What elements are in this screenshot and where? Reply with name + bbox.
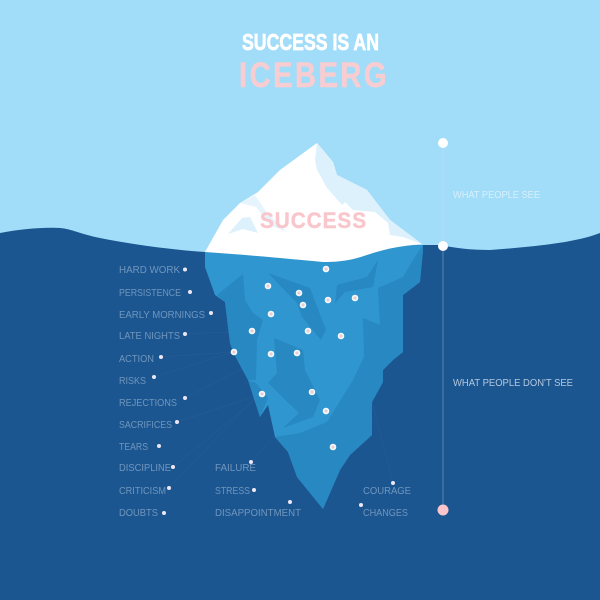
right column labels	[363, 485, 411, 519]
right column labels: CHANGES	[363, 507, 408, 519]
left column labels: ACTION	[119, 353, 154, 365]
iceberg	[205, 143, 423, 509]
left column labels: CRITICISM	[119, 485, 166, 497]
left column labels: REJECTIONS	[119, 397, 177, 409]
sea water	[0, 228, 600, 600]
iceberg: upper left snow shadow	[240, 195, 287, 232]
middle column labels: FAILURE	[215, 462, 256, 474]
title: SUCCESS IS AN	[242, 29, 379, 55]
left column labels	[119, 264, 205, 519]
right column labels: COURAGE	[363, 485, 411, 497]
label dots	[152, 268, 395, 515]
left column labels: RISKS	[119, 375, 146, 387]
left column labels: HARD WORK	[119, 264, 180, 276]
left column labels: DISCIPLINE	[119, 462, 171, 474]
left column labels: LATE NIGHTS	[119, 330, 180, 342]
iceberg: right snow shadow	[315, 143, 422, 244]
caption: what people don't see: WHAT PEOPLE DON'T SEE	[453, 377, 573, 389]
iceberg: right and bottom shaded facet	[275, 245, 423, 509]
left column labels: EARLY MORNINGS	[119, 309, 205, 321]
marker: bottom	[438, 504, 448, 516]
faint connector lines	[154, 331, 393, 488]
iceberg: upper right shaded facet	[335, 260, 378, 303]
iceberg: centre shaded facet	[268, 273, 326, 340]
iceberg: left snow shadow	[228, 217, 258, 234]
iceberg: left shaded facet	[217, 274, 263, 380]
middle column labels: STRESS	[215, 485, 250, 497]
marker: waterline	[438, 241, 448, 251]
left column labels: SACRIFICES	[119, 419, 172, 431]
iceberg dots	[231, 266, 358, 450]
middle column labels: DISAPPOINTMENT	[215, 507, 302, 519]
iceberg: underwater body	[205, 245, 423, 509]
title	[239, 29, 389, 95]
iceberg label: SUCCESS	[260, 208, 367, 233]
left column labels: PERSISTENCE	[119, 287, 181, 299]
title: ICEBERG	[239, 56, 389, 95]
scale line	[438, 138, 448, 516]
marker: top	[438, 138, 448, 148]
iceberg: lower centre shaded facet	[268, 338, 320, 428]
iceberg: snow cap	[205, 143, 422, 262]
middle column labels	[215, 462, 302, 519]
left column labels: DOUBTS	[119, 507, 158, 519]
iceberg: lower left spike	[248, 380, 268, 417]
left column labels: TEARS	[119, 441, 148, 453]
caption: what people see: WHAT PEOPLE SEE	[453, 189, 540, 201]
